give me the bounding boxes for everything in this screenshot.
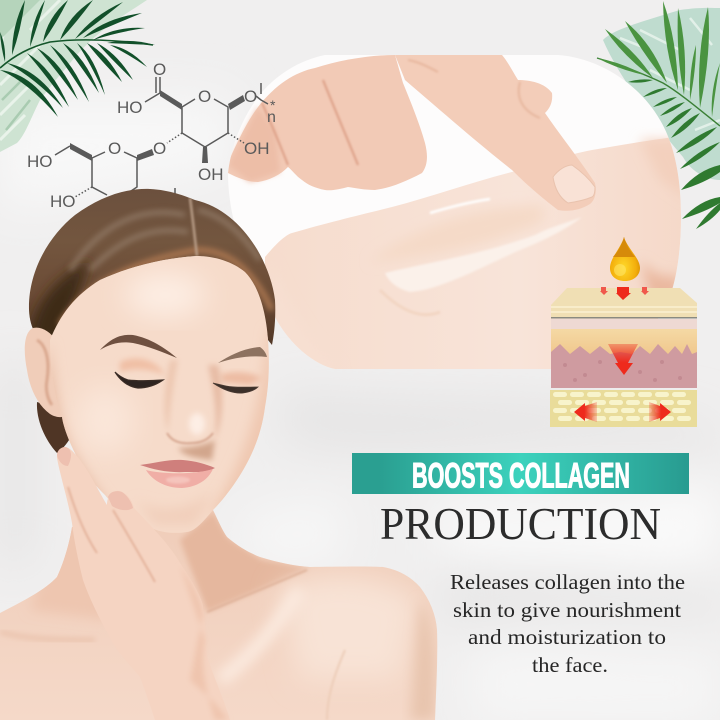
skin layers diagram (550, 237, 697, 427)
layer: fat cells (550, 390, 697, 427)
molecule diagram: O (153, 60, 166, 79)
icon: golden oil drop (610, 237, 640, 281)
molecule diagram: HO (117, 98, 142, 117)
molecule diagram: HO (27, 152, 52, 171)
body text (450, 570, 685, 677)
molecule diagram: O (198, 87, 211, 106)
body text: skin to give nourishment (453, 598, 681, 622)
body text: Releases collagen into the (450, 570, 685, 594)
lips (140, 460, 215, 488)
molecule diagram: O (108, 139, 121, 158)
molecule diagram: * (270, 97, 276, 113)
body text: the face. (532, 653, 608, 677)
heading banner (352, 453, 689, 496)
molecule diagram: OH (198, 165, 224, 184)
cream smear (370, 199, 582, 315)
layer: top skin (551, 288, 697, 317)
molecule diagram (27, 60, 276, 211)
curled fingers (228, 55, 427, 190)
woman portrait (0, 180, 440, 720)
forearm (265, 135, 690, 380)
hair bun (37, 402, 72, 453)
fingernails (57, 447, 133, 510)
molecule diagram: OH (244, 139, 270, 158)
fingernail (553, 165, 595, 203)
molecule diagram: HO (50, 192, 76, 211)
layer: dermis (551, 329, 697, 388)
eyes (115, 372, 163, 388)
photo: fingers applying cream on arm (228, 55, 690, 380)
hair (28, 188, 276, 345)
decorative leaf: top left (0, 0, 155, 152)
ear (25, 328, 62, 417)
molecule diagram: O (244, 87, 257, 106)
eyebrows (100, 335, 177, 358)
body text: and moisturization to (468, 625, 666, 649)
body: neck and shoulders (0, 500, 440, 720)
molecule diagram: n (267, 109, 276, 126)
index finger (395, 55, 596, 211)
nose (167, 433, 213, 443)
molecule diagram: O (153, 139, 166, 158)
hand (57, 448, 230, 720)
arrows: red penetration arrows (574, 287, 671, 422)
decorative leaf: top right (597, 1, 720, 229)
heading: production: PRODUCTION (380, 498, 661, 549)
face (50, 256, 269, 533)
